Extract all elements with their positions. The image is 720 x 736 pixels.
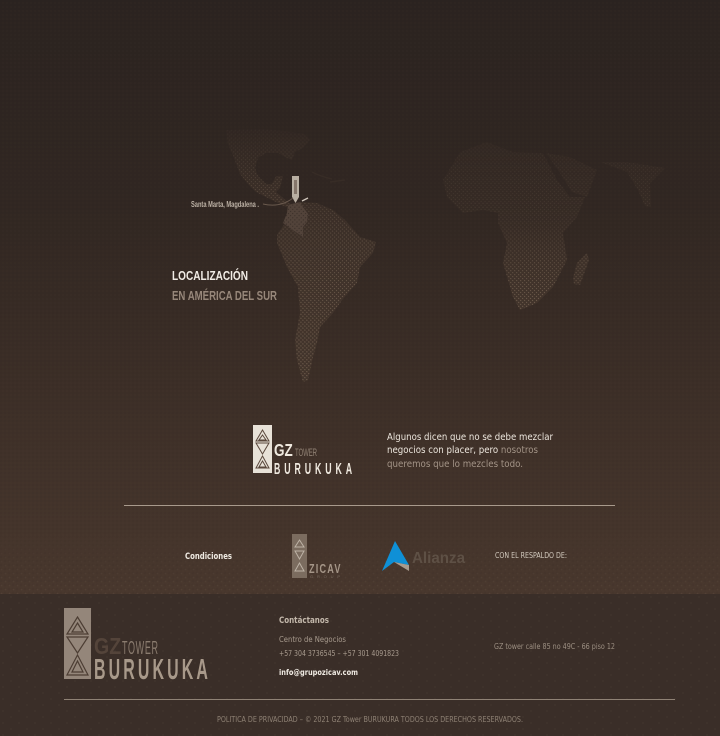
background — [0, 75, 720, 594]
address: GZ tower calle 85 no 49C - 66 piso 12 — [494, 642, 615, 651]
south america — [277, 202, 376, 382]
conditions link: Condiciones — [185, 552, 232, 562]
logo: gz tower burukuka: BURUKUKA — [274, 459, 352, 478]
logo: gz tower burukuka: TOWER — [295, 446, 317, 458]
north and central america — [226, 129, 310, 207]
tagline: negocios con placer, pero nosotros — [387, 445, 538, 456]
heading: localizacion: LOCALIZACIÓN — [172, 268, 248, 283]
footer logo — [64, 608, 208, 685]
contact block: info@grupozicav.com — [279, 668, 358, 677]
world map — [226, 129, 665, 382]
logo: gz tower burukuka: GZ — [274, 441, 293, 461]
location marker — [263, 176, 308, 205]
africa — [443, 142, 585, 310]
logo: zicav group: GROUP — [310, 574, 340, 579]
middle east and india — [546, 153, 597, 197]
backing label: CON EL RESPALDO DE: — [495, 551, 567, 560]
logo: alianza: Alianza — [412, 550, 465, 567]
contact block — [279, 616, 399, 677]
footer panel — [0, 594, 720, 736]
tagline: Algunos dicen que no se debe mezclar — [387, 432, 554, 443]
colombia highlighted — [283, 202, 308, 237]
tagline: queremos que lo mezcles todo. — [387, 459, 523, 470]
contact block: Centro de Negocios — [279, 635, 346, 644]
legal line: POLITICA DE PRIVACIDAD – © 2021 GZ Tower BURUKURA TODOS LOS DERECHOS RESERVADOS. — [217, 715, 523, 724]
logo: gz tower burukuka — [253, 425, 352, 478]
heading: localizacion: EN AMÉRICA DEL SUR — [172, 288, 277, 303]
caribbean islands — [312, 172, 345, 182]
logo: zicav group — [292, 534, 341, 579]
heading: localizacion — [172, 268, 277, 303]
madagascar — [573, 253, 589, 285]
footer logo: GZ — [94, 634, 121, 659]
footer logo: BURUKUKA — [94, 653, 208, 685]
contact block: Contáctanos — [279, 616, 329, 626]
tagline — [387, 432, 554, 470]
contact block: +57 304 3736545 – +57 301 4091823 — [279, 649, 399, 658]
logo: alianza — [382, 541, 465, 571]
logo: zicav group: ZICAV — [309, 563, 341, 576]
footer logo: TOWER — [122, 639, 158, 659]
location label: Santa Marta, Magdalena . — [191, 200, 259, 209]
